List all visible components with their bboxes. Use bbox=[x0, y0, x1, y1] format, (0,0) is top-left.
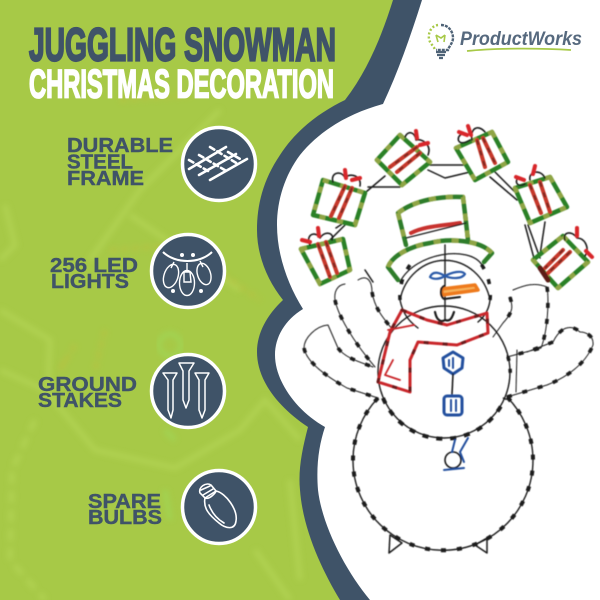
gift 3 bbox=[377, 131, 430, 185]
snowman body frame bbox=[353, 245, 533, 553]
gift 5 bbox=[515, 166, 567, 223]
title bbox=[29, 18, 336, 106]
icon: steel frame mesh bbox=[182, 128, 256, 200]
label: spare bulbs bbox=[88, 491, 162, 529]
label: ground stakes: GROUND bbox=[38, 374, 137, 396]
icon: string of lights bbox=[152, 234, 224, 308]
label: 256 LED lights: 256 LED bbox=[50, 255, 138, 277]
icon: ground stakes bbox=[152, 354, 224, 428]
feature: 256 LED lights bbox=[50, 234, 224, 308]
title line 1: JUGGLING SNOWMAN bbox=[29, 18, 336, 70]
gift 6 bbox=[533, 228, 592, 288]
label: durable steel frame bbox=[67, 135, 173, 190]
label: 256 LED lights bbox=[50, 255, 138, 293]
face: eyes and nose bbox=[430, 272, 478, 299]
buttons bbox=[443, 352, 468, 470]
white product panel bbox=[275, 0, 600, 600]
logo: ProductWorks bbox=[429, 25, 582, 58]
product: snowman light decoration bbox=[301, 126, 593, 553]
label: durable steel frame: STEEL bbox=[67, 152, 133, 174]
icon: logo light bulb bbox=[429, 25, 453, 58]
feature: durable steel frame bbox=[67, 128, 256, 200]
label: ground stakes: STAKES bbox=[38, 390, 122, 412]
scarf bbox=[378, 310, 488, 392]
gift 2 bbox=[313, 170, 365, 225]
logo wordmark: ProductWorks bbox=[460, 28, 582, 50]
label: durable steel frame: FRAME bbox=[67, 168, 144, 190]
feature: spare bulbs bbox=[88, 470, 256, 544]
title line 2: CHRISTMAS DECORATION bbox=[29, 62, 334, 106]
logo underline bbox=[467, 49, 571, 51]
gift 1 bbox=[301, 228, 350, 284]
feature: ground stakes bbox=[38, 354, 224, 428]
snowman arms bbox=[304, 278, 593, 398]
label: spare bulbs: SPARE bbox=[88, 491, 161, 513]
dark blue scalloped band bbox=[257, 0, 600, 600]
label: spare bulbs: BULBS bbox=[88, 507, 162, 529]
label: 256 LED lights: LIGHTS bbox=[51, 271, 129, 293]
label: ground stakes bbox=[38, 374, 137, 412]
hat bbox=[388, 197, 492, 282]
icon: spare bulb bbox=[182, 470, 256, 544]
label: durable steel frame: DURABLE bbox=[67, 135, 173, 157]
gift 4 bbox=[456, 126, 508, 180]
wires connecting the gifts bbox=[330, 165, 545, 282]
